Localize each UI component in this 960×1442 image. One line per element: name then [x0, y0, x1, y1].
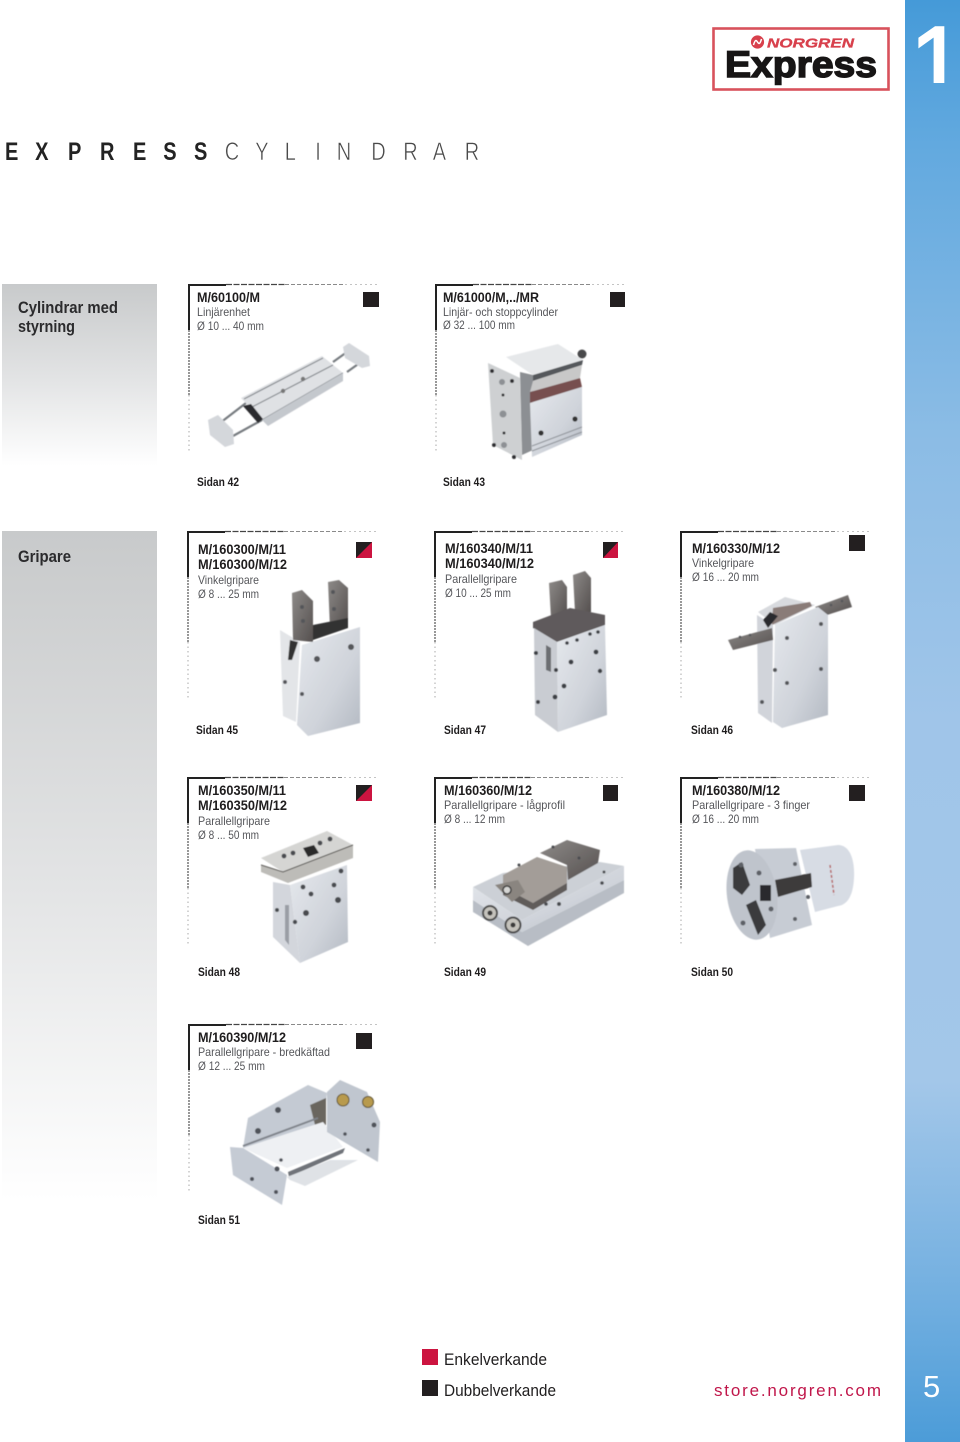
card: M/160380/M/12: Parallellgripare - 3 finger — [692, 798, 810, 812]
card: M/160360/M/12: M/160360/M/12 — [444, 783, 532, 798]
card: M/160350/M: Ø 8 ... 50 mm — [198, 828, 259, 842]
product: angular gripper — [280, 580, 360, 736]
legend — [422, 1349, 556, 1400]
logo wordmark: Express — [725, 44, 877, 85]
card: M/160390/M/12: Parallellgripare - bredkäftad — [198, 1045, 330, 1059]
icon: double acting — [610, 292, 625, 307]
card: M/160330/M/12: Vinkelgripare — [692, 556, 754, 570]
card: M/160350/M: M/160350/M/12 — [198, 798, 287, 813]
page reference: Sidan 51 — [198, 1213, 240, 1227]
card: M/160360/M/12: Parallellgripare - lågprofil — [444, 798, 565, 812]
title — [5, 138, 479, 166]
card: M/160300/M: M/160300/M/11 — [198, 542, 286, 557]
card: M/160300/M: M/160300/M/12 — [198, 557, 287, 572]
page reference: Sidan 47 — [444, 723, 486, 737]
legend label: double acting: Dubbelverkande — [444, 1381, 556, 1400]
icon: double acting — [603, 785, 618, 801]
card: M/160350/M: Parallellgripare — [198, 814, 270, 828]
card: M/160360/M/12 — [434, 777, 624, 979]
section heading: Cylindrar med — [18, 298, 118, 317]
icon: double acting — [849, 785, 865, 801]
card: M/160350/M: M/160350/M/11 — [198, 783, 286, 798]
sidebar — [905, 0, 960, 1442]
page reference: Sidan 43 — [443, 475, 485, 489]
icon: single and double acting — [356, 542, 372, 558]
product: wide parallel gripper — [261, 831, 353, 963]
logo mark — [751, 35, 764, 49]
title: EXPRESS — [5, 138, 207, 166]
legend swatch: double acting — [422, 1380, 438, 1396]
card: M/160380/M/12 — [680, 777, 871, 979]
card: M/160340/M: Parallellgripare — [445, 572, 517, 586]
legend swatch: single acting — [422, 1349, 438, 1365]
card: M/160380/M/12: M/160380/M/12 — [692, 783, 780, 798]
product: stop cylinder — [488, 344, 586, 460]
product: angular gripper with arms — [728, 595, 852, 728]
website: store.norgren.com — [714, 1381, 881, 1400]
card: M/160340/M: M/160340/M/11 — [445, 541, 533, 556]
icon: single and double acting — [603, 542, 618, 558]
card: M/160360/M/12: Ø 8 ... 12 mm — [444, 812, 505, 826]
product: linear unit — [208, 343, 370, 447]
panel: Cylindrar med styrning — [2, 284, 157, 466]
panel: Gripare — [2, 531, 157, 1201]
icon: double acting — [363, 292, 379, 307]
page reference: Sidan 45 — [196, 723, 238, 737]
page reference: Sidan 46 — [691, 723, 733, 737]
card: M/160330/M/12 — [680, 531, 871, 737]
title: CYLINDRAR — [225, 138, 479, 166]
card: M/160340/M — [434, 531, 624, 737]
section heading: Gripare — [18, 547, 71, 566]
card: M/160330/M/12: Ø 16 ... 20 mm — [692, 570, 759, 584]
card: M/160340/M: M/160340/M/12 — [445, 556, 534, 571]
card: M/160380/M/12: Ø 16 ... 20 mm — [692, 812, 759, 826]
card: M/160300/M: Ø 8 ... 25 mm — [198, 587, 259, 601]
panel: Cylindrar med styrning: styrning — [18, 317, 75, 336]
page reference: Sidan 42 — [197, 475, 239, 489]
product: parallel gripper — [533, 571, 607, 732]
card: M/160330/M/12: M/160330/M/12 — [692, 541, 780, 556]
card: M/60100/M: Linjärenhet — [197, 305, 251, 319]
card: M/160390/M/12: Ø 12 ... 25 mm — [198, 1059, 265, 1073]
card: M/60100/M: Ø 10 ... 40 mm — [197, 319, 264, 333]
product: three finger gripper — [721, 845, 854, 943]
logo brand: NORGREN — [767, 36, 855, 50]
card: M/160350/M — [187, 777, 377, 979]
card: M/61000/M,../MR: Linjär- och stoppcylinder — [443, 305, 558, 319]
product: wide jaw gripper — [230, 1080, 380, 1205]
card: M/160340/M: Ø 10 ... 25 mm — [445, 586, 511, 600]
card: M/60100/M — [188, 284, 379, 489]
icon: double acting — [356, 1033, 372, 1049]
icon: double acting — [849, 535, 865, 551]
page reference: Sidan 50 — [691, 965, 733, 979]
card: M/160300/M: Vinkelgripare — [198, 573, 259, 587]
card: M/160390/M/12 — [188, 1024, 380, 1227]
logo: Norgren Express — [714, 28, 888, 90]
card: M/61000/M,../MR: M/61000/M,../MR — [443, 290, 539, 305]
page number: 5 — [923, 1369, 940, 1404]
card: M/160300/M — [187, 531, 377, 737]
product: low profile gripper — [473, 840, 624, 946]
page reference: Sidan 49 — [444, 965, 486, 979]
card: M/61000/M,../MR — [435, 284, 626, 489]
card: M/61000/M,../MR: Ø 32 ... 100 mm — [443, 318, 515, 332]
card: M/60100/M: M/60100/M — [197, 290, 260, 305]
page reference: Sidan 48 — [198, 965, 240, 979]
card: M/160390/M/12: M/160390/M/12 — [198, 1030, 286, 1045]
icon: single and double acting — [356, 785, 372, 801]
legend label: single acting: Enkelverkande — [444, 1350, 547, 1369]
